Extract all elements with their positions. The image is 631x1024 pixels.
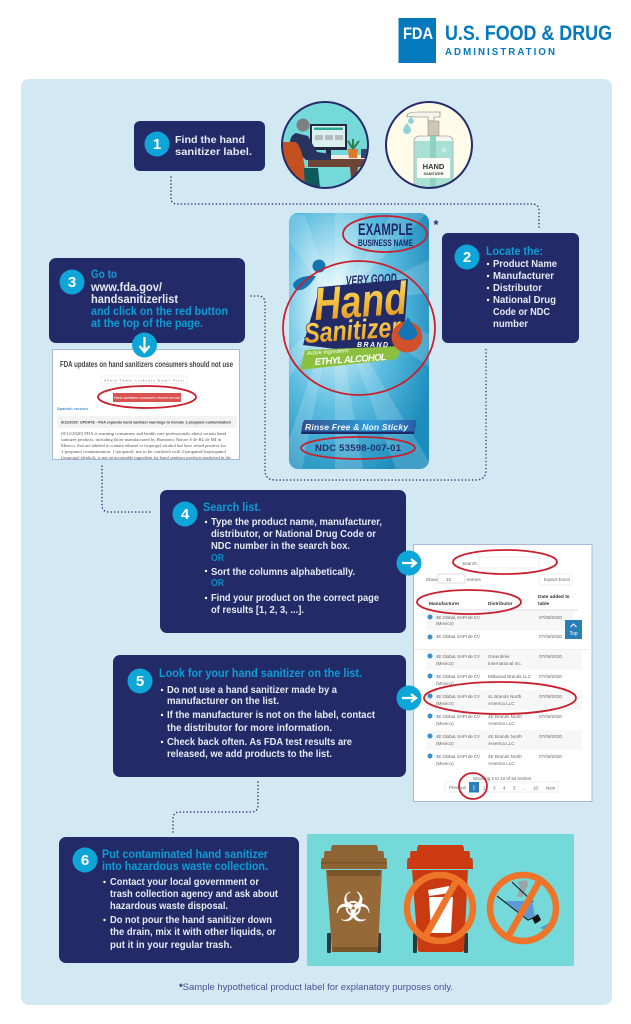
step 6 box: Do not pour the hand sanitizer down [110,914,272,926]
screenshot: search results table: America LLC [488,761,515,766]
screenshot: search results table: 07/08/2020 [539,674,562,679]
screenshot: search results table: Top [569,631,578,637]
step 1 box: sanitizer label. [175,146,252,158]
icon: sanitizer bottle [386,102,472,196]
illustration panel: waste bins [307,834,574,966]
connector: step 3 to step 4 [102,466,153,512]
screenshot: FDA updates page: Hand sanitizers consumers should not use [114,396,180,400]
icon: arrow to list [396,686,422,710]
step 3 box: 3 [68,274,76,291]
step 5 box: manufacturer on the list. [167,695,279,707]
step 3 box: www.fda.gov/ [90,282,163,294]
screenshot: search results table: Export Excel [544,577,570,582]
example product label: BRAND [357,342,388,349]
step 5 box: 5 [136,673,144,690]
screenshot: search results table: (Mexico) [436,661,454,666]
step 4 box [160,490,406,633]
step 2 box: Manufacturer [493,270,554,282]
step 4 box: OR [211,577,224,589]
step 4 box: Find your product on the correct page [211,592,379,604]
step 3 box [49,258,245,343]
screenshot: search results table: 5 [513,786,516,790]
screenshot: search results table: entries [467,577,481,582]
step 5 box: the distributor for more information. [167,722,332,734]
step 3 box: handsanitizerlist [91,294,178,306]
logo: FDA: FDA [403,24,433,43]
screenshot: search results table: 1 [472,786,476,792]
screenshot: search results table: ... [523,786,527,790]
screenshot: FDA updates page: 1-propanol contamination. 1-propanol, not to be confused with 2-propanol/isopropanol [61,449,227,455]
step 6 box: the drain, mix it with other liquids, or [110,926,276,938]
icon: trash bin prohibited [407,845,473,953]
step 4 box: NDC number in the search box. [211,540,350,552]
step 4 box: of results [1, 2, 3, ...]. [211,604,304,616]
icon: arrow to search box [396,550,422,576]
screenshot: search results table: Manufacturer [429,601,460,607]
screenshot: search results table: 4E Global, SAPI de CV [436,714,481,719]
icon: person at computer [282,102,368,188]
step 5 box: released, we add products to the list. [167,748,332,760]
screenshot: search results table: 4 [503,786,506,790]
screenshot: FDA updates page: [8/12/2020] FDA is warning consumers and health care professionals about certain hand [61,431,227,436]
connector: step 5 to step 6 [173,782,258,832]
connector: step 3 to step 2 [251,296,486,480]
screenshot: search results table: 4E Global, SAPI de CV [436,615,481,620]
screenshot: search results table: (Mexico) [436,761,454,766]
screenshot: search results table: 4E Brands North [488,754,522,759]
step 1 box: Find the hand [175,134,245,146]
example product label: EXAMPLE [358,220,413,239]
screenshot: search results table: Showing 1 to 10 of 94 entries [473,776,532,781]
screenshot: search results table: Greenbrier [488,654,510,659]
step 2 box: Product Name [493,258,557,270]
step 2 box: Distributor [493,282,542,294]
screenshot: search results table: Distributor [488,601,513,607]
screenshot: search results table: 2 [483,786,486,790]
step 2 box: 2 [463,249,471,266]
step 4 box: Sort the columns alphabetically. [211,566,355,578]
screenshot: search results table: 07/08/2020 [539,714,562,719]
screenshot: search results table: America LLC [488,721,515,726]
screenshot: FDA updates page: (isopropyl alcohol), is not an acceptable ingredient for hand sanitizer products marketed in the [61,455,231,461]
screenshot: search results table: 4E Global, SAPI de CV [436,634,481,639]
screenshot: search results table: 4E Global, SAPI de CV [436,734,481,739]
step 4 box: Search list. [203,500,261,514]
step 3 box: and click on the red button [91,304,228,318]
screenshot: search results table: 4E Global, SAPI de CV [436,754,481,759]
screenshot: search results table: 07/08/2020 [539,615,562,620]
screenshot: search results table: America LLC [488,741,515,746]
screenshot: search results table: 07/08/2020 [539,634,562,639]
screenshot: search results table: (Mexico) [436,741,454,746]
step 2 box: number [493,318,528,330]
screenshot: FDA updates page: Spanish version [57,406,88,411]
screenshot: search results table: Search: [462,561,478,566]
step 6 box [59,837,299,963]
screenshot: search results table: 4E Global, SAPI de CV [436,674,481,679]
screenshot: search results table: table [538,601,550,607]
example product label: VERY GOOD [345,270,397,288]
screenshot: search results table [414,544,592,802]
screenshot: search results table: 07/08/2020 [539,654,562,659]
example product label: ETHYL ALCOHOL [314,352,387,368]
step 6 box: Contact your local government or [110,876,259,888]
screenshot: FDA updates page: Share Tweet LinkedIn Email Print [104,378,184,382]
icon: sanitizer bottle: SANITIZER [423,172,444,176]
screenshot: search results table: Date added to [538,594,570,600]
screenshot: search results table: 4L Brands North [488,694,522,699]
step 2 box [442,233,579,343]
example product label: Sanitizer [303,311,403,349]
icon: biohazard bin [321,845,387,953]
screenshot: search results table: 4E Global, SAPI de CV [436,694,481,699]
step 1 box: 1 [153,136,161,153]
step 5 box: Check back often. As FDA test results are [167,736,352,748]
step 1 box [134,121,265,171]
icon: pouring liquid prohibited [490,875,556,941]
screenshot: search results table: Next [546,786,556,790]
screenshot: FDA updates page: FDA updates on hand sanitizers consumers should not use [60,360,233,369]
screenshot: FDA updates page: sanitizer products, including those manufactured by Harmonic Nature S de RL de MI in [61,437,222,443]
step 6 box: hazardous waste disposal. [110,900,228,912]
screenshot: search results table: (Mexico) [436,621,454,626]
icon: sanitizer bottle: HAND [423,162,445,171]
step 6 box: Put contaminated hand sanitizer [102,847,268,861]
screenshot: search results table: America LLC [488,701,515,706]
screenshot: search results table: 4E Global, SAPI de CV [436,654,481,659]
screenshot: search results table: 07/08/2020 [539,734,562,739]
step 2 box: Code or NDC [493,306,550,318]
example product label: Rinse Free & Non Sticky [305,422,409,432]
icon: down arrow [132,332,157,358]
step 6 box: into hazardous waste collection. [102,859,268,873]
step 5 box [113,655,406,777]
screenshot: search results table: 10 [533,786,539,790]
screenshot: search results table: Show [426,577,438,582]
screenshot: search results table: (Mexico) [436,681,454,686]
footnote: *Sample hypothetical product label for explanatory purposes only. [179,982,453,993]
screenshot: FDA updates page: 8/12/2020: UPDATE - FDA expands hand sanitizer warnings to include 1-propanol contamination [61,420,232,424]
icon: biohazard bin: ☣ [335,885,371,931]
screenshot: search results table: (Mexico) [436,721,454,726]
step 6 box: put it in your regular trash. [110,939,232,951]
step 3 box: at the top of the page. [91,316,203,330]
example product label: Active Ingredient: [306,348,350,357]
step 6 box: 6 [81,852,89,869]
connector: step 1 to step 2 [171,177,539,229]
step 5 box: Look for your hand sanitizer on the list. [159,666,362,680]
step 4 box: Type the product name, manufacturer, [211,516,382,528]
step 6 box: trash collection agency and ask about [110,888,278,900]
step 4 box: distributor, or National Drug Code or [211,528,376,540]
example product label: NDC 53598-007-01 [315,443,402,454]
screenshot: search results table: 4E Brands North [488,714,522,719]
example product label: Hand [312,272,409,330]
asterisk: * [434,217,440,232]
step 5 box: Do not use a hand sanitizer made by a [167,684,337,696]
screenshot: search results table: 10 [446,577,452,582]
screenshot: search results table: Midwood Brands LLC [488,674,532,679]
screenshot: search results table: 07/08/2020 [539,694,562,699]
screenshot: search results table: International Inc. [488,661,522,666]
screenshot: search results table: 07/08/2020 [539,754,562,759]
example product label: BUSINESS NAME [358,238,413,248]
step 4 box: OR [211,552,224,564]
screenshot: search results table: (Mexico) [436,701,454,706]
screenshot: search results table: Previous [449,785,467,790]
screenshot: search results table: 3 [493,786,496,790]
screenshot: FDA updates page [52,350,240,461]
screenshot: search results table: 4E Brands North [488,734,522,739]
step 4 box: 4 [181,506,190,523]
logo: FDA [398,18,612,63]
step 2 box: National Drug [493,294,556,306]
step 2 box: Locate the: [486,244,543,258]
step 5 box: If the manufacturer is not on the label, contact [167,709,375,721]
example product label [282,213,436,469]
screenshot: FDA updates page: Mexico, that are labeled to contain ethanol or isopropyl alcohol but have tested positive for [61,443,227,449]
logo: FDA: ADMINISTRATION [445,47,555,58]
step 3 box: Go to [91,267,117,281]
